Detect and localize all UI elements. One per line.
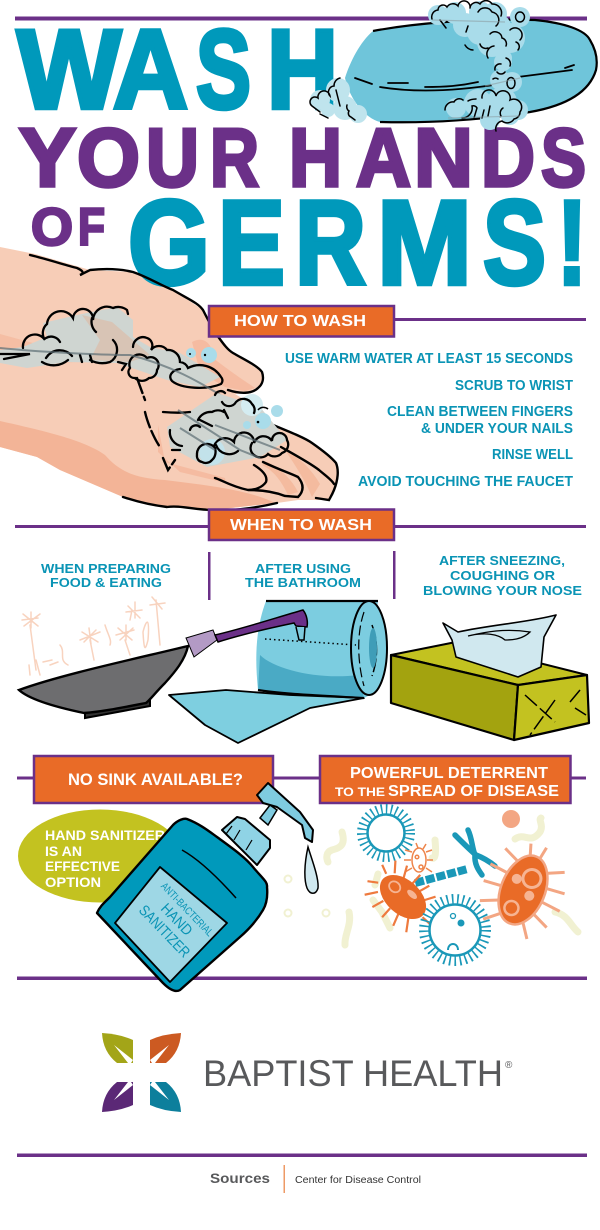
blue spiked germ, upper <box>362 810 410 856</box>
small orange germ <box>404 843 433 872</box>
label text on bottle: HAND <box>157 900 196 939</box>
heading: how to wash <box>209 306 586 336</box>
label text on bottle <box>134 880 216 963</box>
icon: paper towel roll <box>169 601 387 743</box>
foam on top hand <box>0 307 225 398</box>
callout: hand sanitizer option: EFFECTIVE <box>45 858 120 874</box>
text block: washing steps: USE WARM WATER AT LEAST 15 SECONDS <box>285 351 573 367</box>
label: after sneezing: BLOWING YOUR NOSE <box>423 583 582 598</box>
title <box>17 7 587 310</box>
heading: when to wash: WHEN TO WASH <box>230 517 372 534</box>
text block: washing steps <box>285 351 573 490</box>
title: YOUR HANDS: D <box>481 111 535 204</box>
illustration: bar of soap with foam <box>310 1 597 131</box>
logo wordmark: BAPTIST HEALTH <box>203 1052 503 1094</box>
hand outline and foam <box>0 255 338 510</box>
label: after bathroom: AFTER USING <box>255 561 351 576</box>
label: after sneezing: COUGHING OR <box>450 568 556 583</box>
heading: no sink available: NO SINK AVAILABLE? <box>68 771 243 789</box>
label text on bottle: SANITIZER <box>135 902 193 961</box>
bacteria chain <box>414 865 467 887</box>
label: after bathroom: THE BATHROOM <box>245 575 361 590</box>
chromosome <box>455 830 495 875</box>
foam patches on soap <box>310 1 530 131</box>
text block: washing steps: AVOID TOUCHING THE FAUCET <box>358 474 573 490</box>
callout: hand sanitizer option: IS AN <box>45 843 82 859</box>
title: GERMS!: M <box>377 176 472 310</box>
title: YOUR HANDS: N <box>414 111 473 204</box>
icon: sanitizer pump bottle <box>97 783 318 991</box>
title: YOUR HANDS: H <box>289 111 342 204</box>
panel: how to wash <box>209 306 586 490</box>
heading: powerful deterrent <box>320 756 570 803</box>
icon: frying pan <box>19 610 307 718</box>
heading: powerful deterrent: POWERFUL DETERRENT <box>350 765 549 782</box>
sources: Center for Disease Control <box>295 1175 421 1186</box>
label text on bottle: ANTI-BACTERIAL <box>158 880 216 939</box>
callout: hand sanitizer option: HAND SANITIZER <box>45 827 165 843</box>
heading: powerful deterrent: TO THE <box>335 787 385 799</box>
label: after sneezing: AFTER SNEEZING, <box>439 553 565 568</box>
panel: no sink available <box>17 756 587 991</box>
title: WASH: H <box>267 7 338 132</box>
label: preparing food: FOOD & EATING <box>50 575 162 590</box>
icon: tissue box <box>391 615 589 740</box>
title: GERMS!: E <box>218 176 285 310</box>
title: YOUR HANDS: R <box>210 111 259 204</box>
callout: hand sanitizer option: OPTION <box>45 874 101 890</box>
panel: when to wash <box>15 510 589 743</box>
title: GERMS!: G <box>128 176 210 310</box>
heading: when to wash <box>15 510 586 540</box>
title: WASH: W <box>17 7 121 132</box>
heading: how to wash: HOW TO WASH <box>234 313 366 330</box>
title: OF: O <box>31 198 73 257</box>
logo mark <box>102 1033 181 1112</box>
text block: washing steps: & UNDER YOUR NAILS <box>421 421 573 437</box>
icon: steam over pan <box>22 597 165 675</box>
callout: hand sanitizer option <box>18 810 182 902</box>
heading: no sink available <box>34 756 273 803</box>
title: YOUR HANDS: A <box>356 111 411 204</box>
sources <box>210 1165 421 1193</box>
blue spiked germ, lower <box>424 900 486 960</box>
title: YOUR HANDS: O <box>77 111 140 204</box>
large peach bacterium <box>469 831 580 947</box>
logo: Baptist Health <box>102 1033 513 1112</box>
label: preparing food <box>41 561 171 590</box>
label: after sneezing <box>423 553 582 598</box>
text block: washing steps: RINSE WELL <box>492 447 573 463</box>
registered mark: ® <box>505 1060 513 1071</box>
heading: powerful deterrent: SPREAD OF DISEASE <box>388 783 559 800</box>
sources: Sources <box>210 1170 270 1186</box>
orange spiked bacterium <box>356 851 450 944</box>
foam on palm <box>163 391 288 467</box>
label: after bathroom <box>245 561 361 590</box>
title: GERMS!: S <box>483 176 546 310</box>
text block: washing steps: CLEAN BETWEEN FINGERS <box>387 404 573 420</box>
title: WASH: S <box>196 7 251 132</box>
text block: washing steps: SCRUB TO WRIST <box>455 378 573 394</box>
peach blob <box>502 810 520 828</box>
illustration: hand skin base <box>0 247 338 510</box>
label: preparing food: WHEN PREPARING <box>41 561 171 576</box>
title: YOUR HANDS: Y <box>19 111 76 204</box>
title: YOUR HANDS: S <box>541 111 586 204</box>
germ cluster illustration <box>287 810 580 960</box>
title: GERMS!: ! <box>557 176 587 310</box>
title: WASH: A <box>113 7 188 132</box>
pale squiggles <box>287 818 578 945</box>
title: OF: F <box>78 198 105 257</box>
title: GERMS!: R <box>295 176 366 310</box>
title: YOUR HANDS: U <box>146 111 199 204</box>
panel: powerful deterrent <box>287 756 586 960</box>
